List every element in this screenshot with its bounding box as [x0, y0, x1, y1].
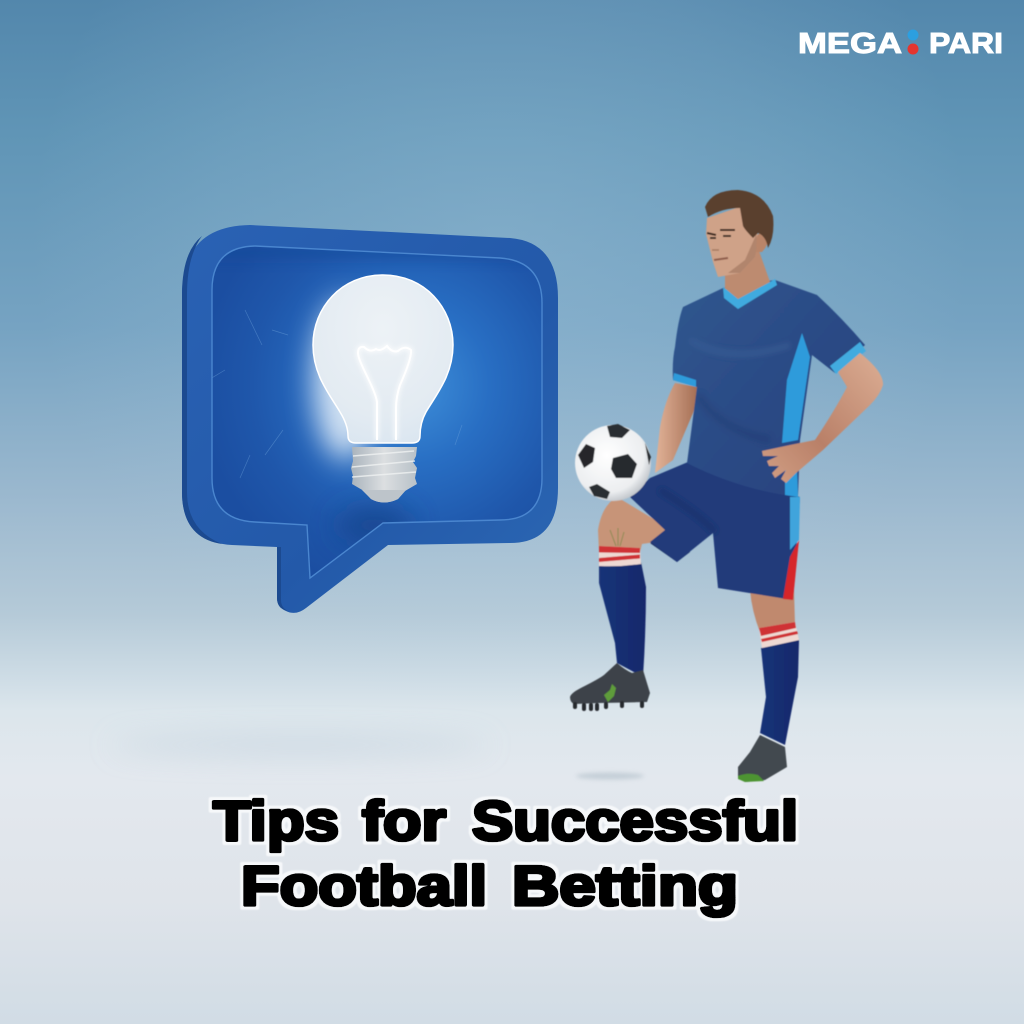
left leg, raised [570, 497, 680, 709]
bubble side edge [182, 236, 222, 544]
eyes and brows [707, 230, 735, 235]
right leg, standing [738, 590, 799, 782]
sock [599, 562, 646, 677]
head [705, 190, 773, 277]
speech bubble with light bulb [182, 225, 558, 613]
jersey [673, 280, 866, 497]
sock band [759, 622, 799, 648]
collar [723, 279, 777, 309]
title [213, 789, 798, 917]
side panel [782, 333, 810, 443]
thigh [598, 497, 680, 552]
boot [570, 663, 650, 704]
bulb base [351, 447, 417, 502]
title: Betting [512, 854, 738, 917]
knee hair [610, 528, 624, 546]
boot [738, 735, 787, 782]
football player [570, 190, 883, 782]
shorts [630, 462, 800, 600]
nose and mouth [712, 249, 719, 251]
ball [575, 424, 651, 501]
ear [756, 231, 768, 252]
logo: MEGA PARI: PARI [929, 28, 1003, 60]
right arm and hand [762, 353, 883, 483]
thigh [750, 590, 795, 632]
neck [725, 248, 770, 303]
logo: MEGA PARI: MEGA [798, 28, 902, 60]
jersey folds [702, 346, 786, 418]
title: Tips [213, 789, 339, 852]
sleeve cuffs [830, 342, 866, 374]
light bulb [313, 275, 453, 502]
filament [358, 346, 411, 440]
left arm [655, 383, 697, 473]
title: Football [241, 854, 487, 917]
filament glow [358, 346, 411, 440]
title: Successful [472, 789, 798, 852]
face [706, 205, 758, 277]
sock band [599, 546, 641, 566]
sock [760, 640, 799, 745]
title: for [362, 789, 446, 852]
bubble inner panel [212, 246, 541, 576]
logo: MEGA PARI [798, 28, 1003, 60]
bubble frame [182, 225, 558, 613]
hair [705, 190, 773, 248]
